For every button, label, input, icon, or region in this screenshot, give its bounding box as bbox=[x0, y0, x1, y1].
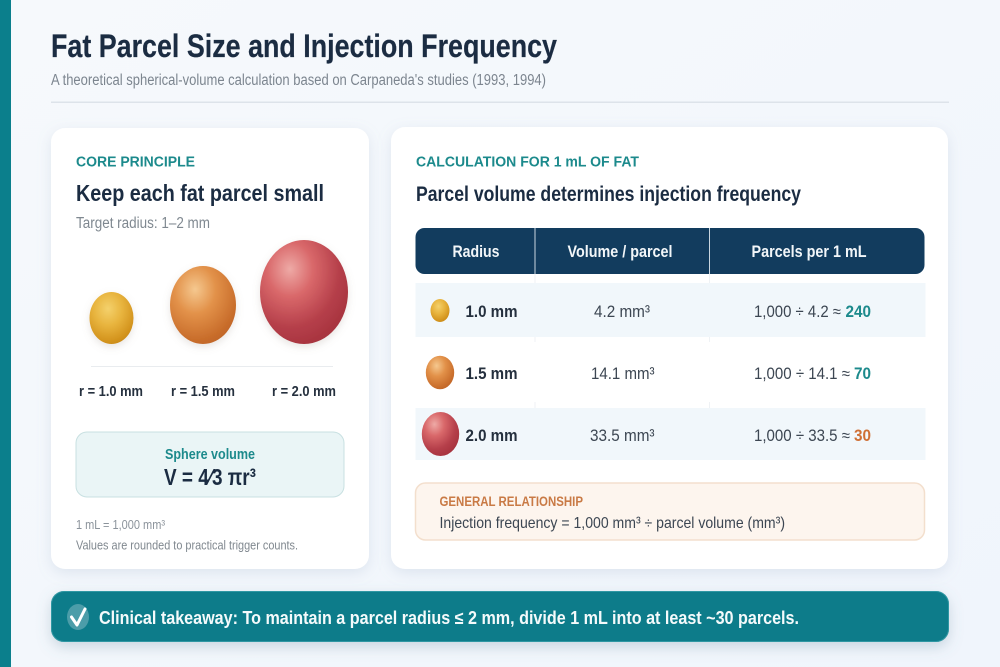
callout: sphere volume formula: Sphere volume bbox=[165, 446, 255, 463]
table row: 1.0 mm: 4.2 mm³ bbox=[594, 303, 650, 321]
target radius text: Target radius: 1–2 mm bbox=[76, 215, 210, 232]
callout: sphere volume formula: V = 4⁄3 πr³ bbox=[164, 464, 256, 490]
table row: 1.0 mm: 240 bbox=[846, 302, 871, 321]
table row: 2.0 mm: 33.5 mm³ bbox=[590, 427, 655, 445]
callout: general relationship: Injection frequency = 1,000 mm³ ÷ parcel volume (mm³) bbox=[440, 515, 785, 532]
table row: 1.0 mm bbox=[416, 283, 926, 337]
table row: 2.0 mm: 2.0 mm bbox=[466, 426, 518, 445]
table row: 1.5 mm: 1,000 ÷ 14.1 ≈ bbox=[754, 365, 850, 383]
table row: 1.5 mm: 70 bbox=[854, 364, 871, 383]
table row: 1.0 mm: 1.0 mm bbox=[466, 302, 518, 321]
eyebrow: core principle: CORE PRINCIPLE bbox=[76, 154, 195, 170]
label: r = 1.0 mm: r = 1.0 mm bbox=[79, 383, 143, 400]
icon: check mark bbox=[67, 604, 89, 630]
eyebrow: calculation: CALCULATION FOR 1 mL OF FAT bbox=[416, 154, 639, 170]
table row: 1.5 mm: 14.1 mm³ bbox=[591, 365, 655, 383]
table header: Volume / parcel bbox=[568, 243, 672, 261]
icon: large parcel sphere bbox=[260, 240, 348, 344]
callout: sphere volume formula bbox=[76, 432, 344, 497]
table row: 2.0 mm bbox=[416, 408, 926, 460]
panel heading: parcel volume: Parcel volume determines injection frequency bbox=[416, 183, 801, 206]
table header: Parcels per 1 mL bbox=[752, 243, 866, 261]
note: unit conversion: 1 mL = 1,000 mm³ bbox=[76, 518, 165, 532]
panel heading: keep each fat parcel small: Keep each fat parcel small bbox=[76, 180, 324, 206]
takeaway text: Clinical takeaway: To maintain a parcel radius ≤ 2 mm, divide 1 mL into at least ~30 parcels. bbox=[99, 608, 799, 628]
takeaway banner bbox=[51, 591, 949, 642]
panel: core principle bbox=[51, 128, 369, 569]
callout: general relationship bbox=[416, 483, 924, 540]
subtitle: A theoretical spherical-volume calculation based on Carpaneda's studies (1993, 1994) bbox=[51, 72, 546, 89]
table row: 2.0 mm: 30 bbox=[854, 426, 871, 445]
panel: calculation for 1 mL bbox=[391, 127, 948, 569]
table header bbox=[416, 228, 924, 274]
icon: small parcel sphere bbox=[90, 292, 134, 344]
table row: 2.0 mm: 1,000 ÷ 33.5 ≈ bbox=[754, 427, 850, 445]
table bbox=[416, 228, 926, 460]
table header: Radius bbox=[452, 243, 500, 261]
table row: 1.5 mm bbox=[416, 342, 926, 402]
label: r = 1.5 mm: r = 1.5 mm bbox=[171, 383, 235, 400]
table row: 1.0 mm: 1,000 ÷ 4.2 ≈ bbox=[754, 303, 841, 321]
note: rounding: Values are rounded to practical trigger counts. bbox=[76, 538, 298, 552]
table row: 1.5 mm: 1.5 mm bbox=[466, 364, 518, 383]
callout: general relationship: GENERAL RELATIONSHIP bbox=[440, 494, 583, 509]
title: Fat Parcel Size and Injection Frequency bbox=[51, 28, 557, 64]
icon: medium parcel sphere bbox=[170, 266, 236, 344]
label: r = 2.0 mm: r = 2.0 mm bbox=[272, 383, 336, 400]
left accent bar bbox=[0, 0, 11, 667]
